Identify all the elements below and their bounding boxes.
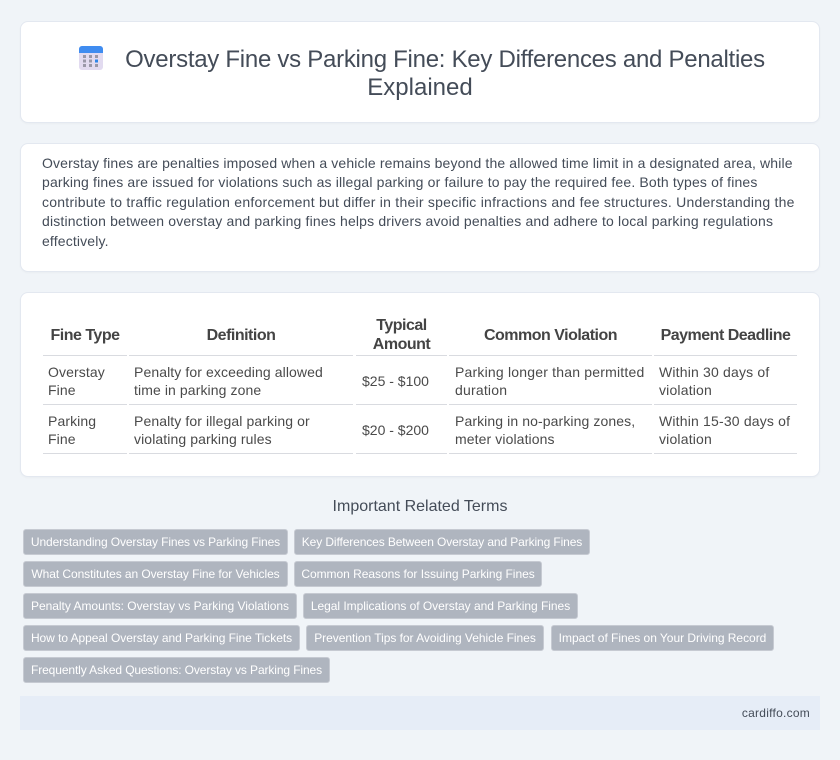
row: Overstay Fine: Parking longer than permitted xyxy=(455,364,644,380)
tag: Prevention Tips for Avoiding Vehicle Fines xyxy=(314,631,536,645)
row: Parking Fine: Within 15-30 days of xyxy=(659,413,790,429)
tag: What Constitutes an Overstay Fine for Vehicles xyxy=(31,567,280,581)
tag: Key Differences Between Overstay and Parking Fines xyxy=(302,535,582,549)
table header: Payment Deadline: Payment Deadline xyxy=(661,327,790,344)
tag xyxy=(23,529,288,555)
title: Explained xyxy=(367,74,473,101)
icon: calendar xyxy=(79,46,103,70)
footer xyxy=(20,696,820,730)
tag xyxy=(551,625,774,651)
row: Overstay Fine: Penalty for exceeding allowed xyxy=(134,364,323,380)
table header: Typical Amount: Amount xyxy=(373,336,430,353)
row: Overstay Fine: duration xyxy=(455,382,507,398)
tag xyxy=(303,593,578,619)
text block: intro paragraph: contribute to traffic regulation enforcement but differ in their specific infractions and fee structures. Understanding the xyxy=(42,194,795,210)
row: Parking Fine: violation xyxy=(659,431,712,447)
row: Parking Fine: Penalty for illegal parking or xyxy=(134,413,310,429)
title: Overstay Fine vs Parking Fine: Key Differences and Penalties xyxy=(125,46,765,73)
table header: Typical Amount: Typical xyxy=(376,317,427,334)
row: Parking Fine: violating parking rules xyxy=(134,431,272,447)
tag xyxy=(294,561,542,587)
row: Overstay Fine xyxy=(48,364,770,398)
tag xyxy=(294,529,590,555)
table header: Typical Amount xyxy=(373,317,430,353)
heading: related terms: Important Related Terms xyxy=(333,498,507,515)
panel: introduction xyxy=(20,143,820,272)
row: Parking Fine: Fine xyxy=(48,431,76,447)
table header: Fine Type: Fine Type xyxy=(50,327,120,344)
text block: intro paragraph: parking fines are issued for violations such as illegal parking or failure to pay the required fee. Both types of fines xyxy=(42,174,758,190)
text block: intro paragraph: effectively. xyxy=(42,233,109,249)
tag: Understanding Overstay Fines vs Parking Fines xyxy=(31,535,280,549)
tag xyxy=(23,593,297,619)
row: Overstay Fine: $25 - $100 xyxy=(362,373,429,389)
tag: Legal Implications of Overstay and Parking Fines xyxy=(311,599,570,613)
tag xyxy=(23,561,288,587)
row: Parking Fine: $20 - $200 xyxy=(362,422,429,438)
footer text: cardiffo.com xyxy=(742,706,810,720)
text block: intro paragraph: Overstay fines are penalties imposed when a vehicle remains beyond the allowed time limit in a designated area, while xyxy=(42,155,793,171)
panel: header xyxy=(20,21,820,123)
tag xyxy=(23,657,330,683)
row: Overstay Fine: violation xyxy=(659,382,712,398)
tag: How to Appeal Overstay and Parking Fine Tickets xyxy=(31,631,292,645)
row: Parking Fine: Parking in no-parking zones, xyxy=(455,413,635,429)
tag xyxy=(306,625,544,651)
row: Overstay Fine: Overstay xyxy=(48,364,105,380)
row: Overstay Fine: time in parking zone xyxy=(134,382,261,398)
table header: Definition: Definition xyxy=(207,327,275,344)
row: Overstay Fine: Within 30 days of xyxy=(659,364,769,380)
panel: comparison table xyxy=(20,292,820,477)
tag: Impact of Fines on Your Driving Record xyxy=(559,631,766,645)
tag list: related terms xyxy=(23,529,774,683)
tag: Common Reasons for Issuing Parking Fines xyxy=(301,567,535,581)
tag: Frequently Asked Questions: Overstay vs Parking Fines xyxy=(31,663,322,677)
table header: Common Violation: Common Violation xyxy=(484,327,617,344)
title xyxy=(125,46,765,101)
text block: intro paragraph xyxy=(42,155,795,249)
tag: Penalty Amounts: Overstay vs Parking Violations xyxy=(31,599,289,613)
row: Parking Fine xyxy=(48,413,790,447)
row: Overstay Fine: Fine xyxy=(48,382,76,398)
row: Parking Fine: meter violations xyxy=(455,431,555,447)
tag xyxy=(23,625,300,651)
text block: intro paragraph: distinction between overstay and parking fines helps drivers avoid penalties and adhere to local parking regulations xyxy=(42,213,773,229)
row: Parking Fine: Parking xyxy=(48,413,96,429)
